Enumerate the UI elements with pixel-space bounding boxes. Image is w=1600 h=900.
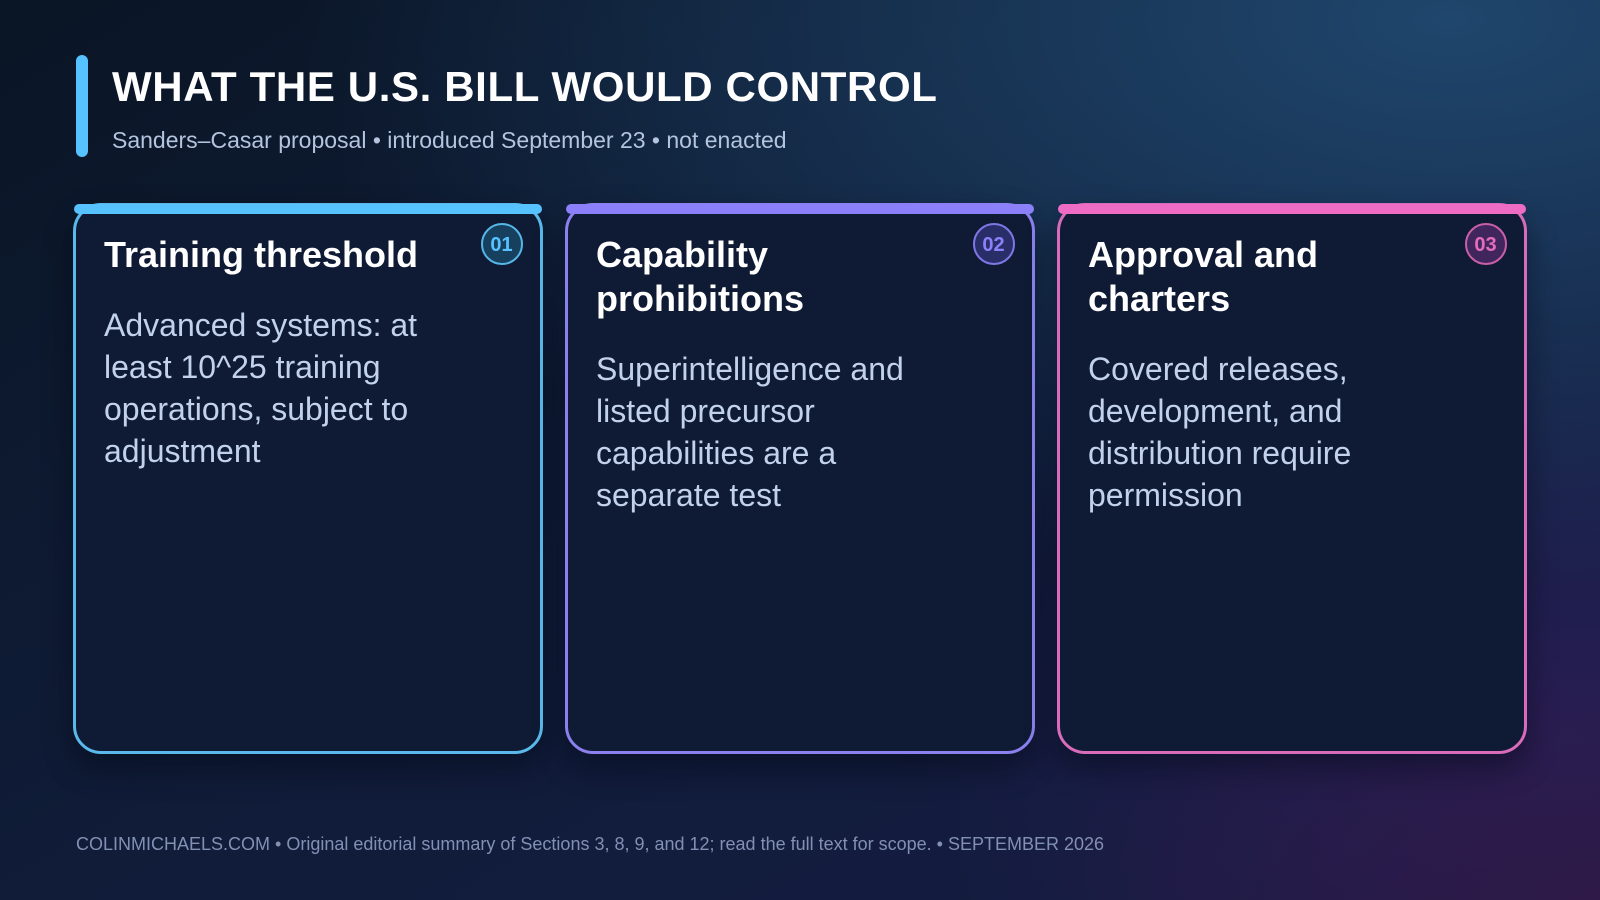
panel: training threshold bbox=[72, 203, 545, 772]
card frame bbox=[1057, 203, 1527, 754]
card text: least 10^25 training bbox=[104, 349, 381, 385]
panel: approval and charters bbox=[1049, 203, 1538, 776]
card text: distribution require bbox=[1088, 435, 1351, 471]
top accent bbox=[74, 204, 542, 214]
card text bbox=[104, 307, 417, 469]
card frame bbox=[565, 203, 1035, 754]
footer: COLINMICHAELS.COM • Original editorial summary of Sections 3, 8, 9, and 12; read the full text for scope. • SEPTEMBER 2026 bbox=[76, 834, 1104, 854]
card text: capabilities are a bbox=[596, 435, 836, 471]
card text: Superintelligence and bbox=[596, 351, 904, 387]
number badge bbox=[481, 223, 523, 265]
card text: Advanced systems: at bbox=[104, 307, 417, 343]
card frame bbox=[73, 203, 543, 754]
card text: permission bbox=[1088, 477, 1243, 513]
top accent bbox=[1058, 204, 1526, 214]
card heading: Training threshold bbox=[104, 234, 418, 275]
subtitle: Sanders–Casar proposal • introduced September 23 • not enacted bbox=[112, 127, 787, 153]
title: WHAT THE U.S. BILL WOULD CONTROL bbox=[112, 63, 938, 110]
card text: operations, subject to bbox=[104, 391, 408, 427]
card heading: prohibitions bbox=[596, 278, 804, 319]
number badge: 03 bbox=[1474, 234, 1497, 256]
number badge: 02 bbox=[982, 234, 1005, 256]
card text: listed precursor bbox=[596, 393, 815, 429]
card text bbox=[1088, 351, 1351, 513]
panel: capability prohibitions bbox=[563, 203, 1044, 774]
card text: Covered releases, bbox=[1088, 351, 1348, 387]
card heading: Capability bbox=[596, 234, 768, 275]
card heading: Approval and bbox=[1088, 234, 1318, 275]
number badge bbox=[973, 223, 1015, 265]
card text: separate test bbox=[596, 477, 781, 513]
card heading bbox=[1088, 234, 1318, 319]
card heading: charters bbox=[1088, 278, 1230, 319]
card text bbox=[596, 351, 904, 513]
number badge: 01 bbox=[490, 234, 513, 256]
top accent bbox=[566, 204, 1034, 214]
card heading bbox=[596, 234, 804, 319]
number badge bbox=[1465, 223, 1507, 265]
card text: adjustment bbox=[104, 433, 261, 469]
card text: development, and bbox=[1088, 393, 1342, 429]
accent bar bbox=[76, 55, 88, 157]
